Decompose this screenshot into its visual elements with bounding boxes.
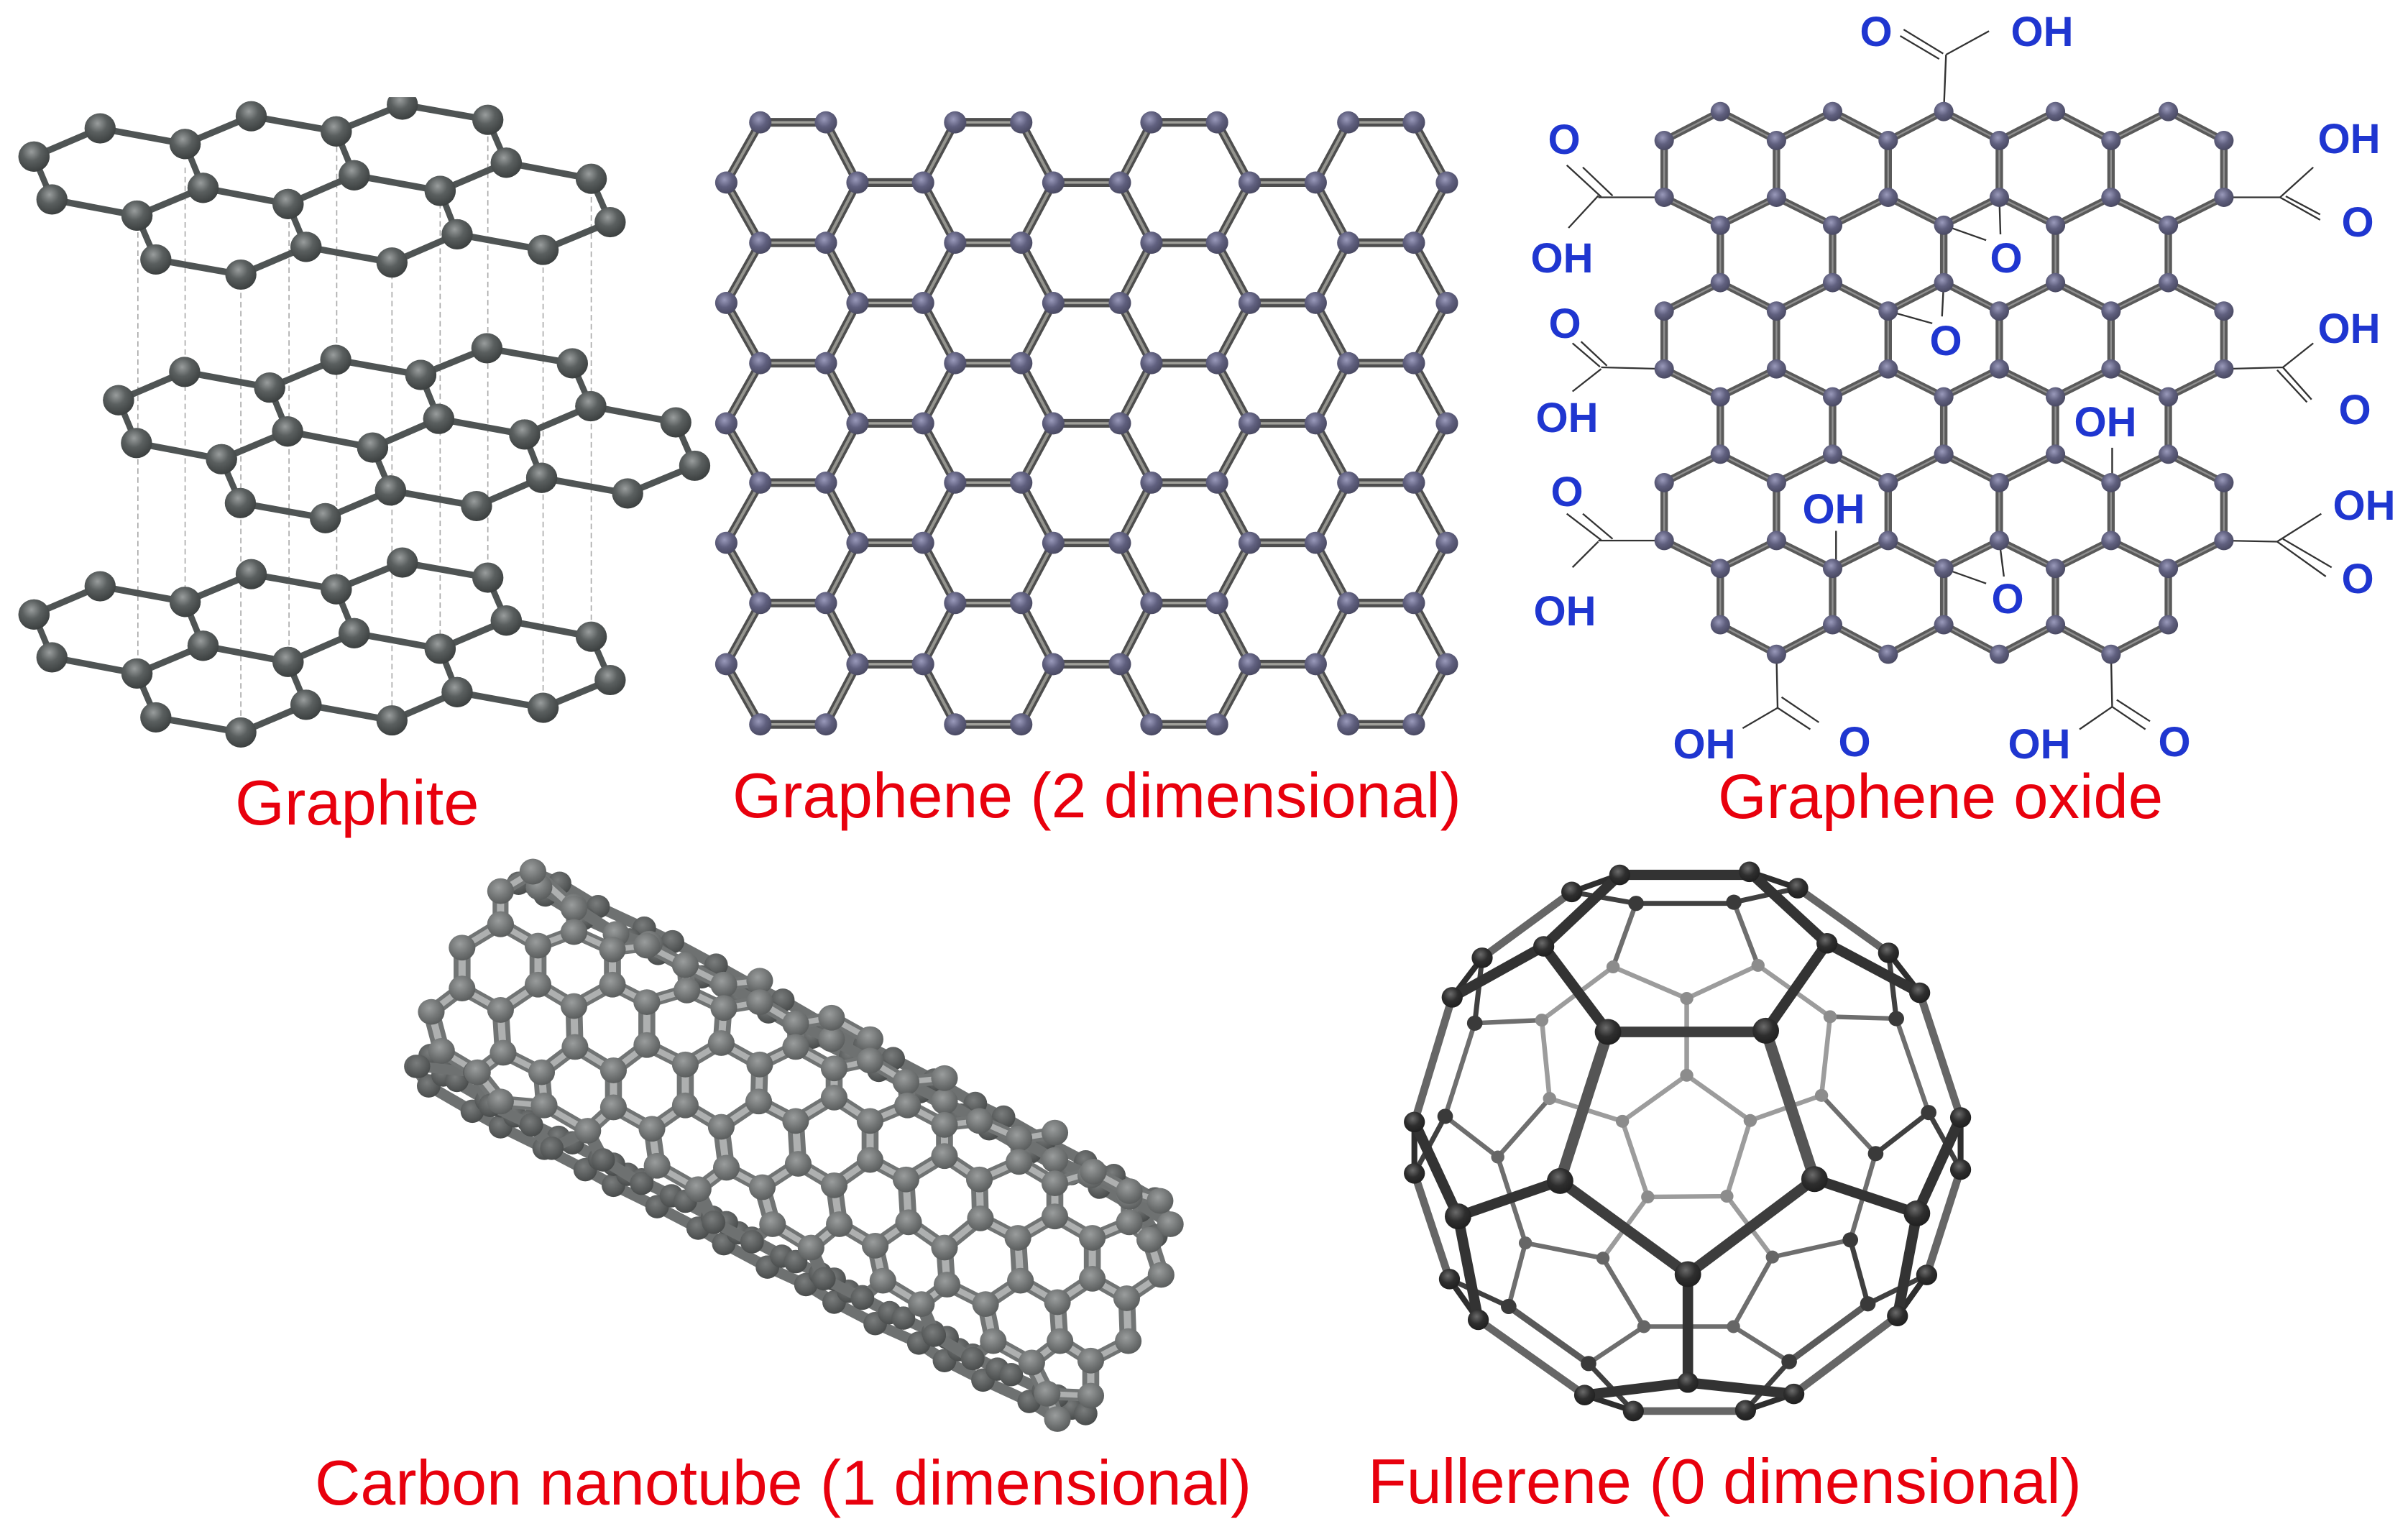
functional group labels: [1531, 9, 2395, 768]
dashed interlayer lines: [138, 127, 592, 733]
label: Graphite: Graphite: [235, 767, 479, 838]
functional group labels: OH: [1535, 395, 1599, 441]
label: Graphene oxide: Graphene oxide: [1718, 762, 2163, 832]
functional group labels: O: [1838, 719, 1871, 766]
carbon lattice: [1664, 111, 2224, 654]
panel: carbon nanotube: [315, 872, 1251, 1518]
functional group labels: O: [2158, 719, 2191, 766]
graphene oxide lattice: [1567, 29, 2332, 730]
label: Graphene (2 dimensional): Graphene (2 dimensional): [732, 761, 1461, 831]
functional group labels: OH: [2074, 399, 2136, 446]
functional group labels: OH: [1531, 235, 1593, 282]
functional group bonds: [1567, 29, 2332, 730]
graphite structure: [34, 72, 694, 733]
functional group labels: OH: [2333, 482, 2395, 529]
panel: graphene: [726, 93, 1479, 831]
top graphene layer: [34, 105, 610, 275]
functional group labels: O: [1548, 116, 1581, 163]
fullerene cage: [1415, 872, 1961, 1411]
rear bonds, light: [1415, 889, 1961, 1411]
panel: graphite: [34, 72, 694, 838]
nanotube structure: [416, 872, 1170, 1419]
rear tube wall edges: [416, 872, 1170, 1419]
front tube wall lattice: [418, 872, 1170, 1419]
functional group labels: O: [2338, 387, 2371, 433]
functional group labels: OH: [1534, 588, 1596, 635]
functional group labels: O: [2341, 556, 2374, 602]
functional group labels: O: [1991, 576, 2024, 623]
functional group labels: O: [1929, 318, 1962, 364]
panel: fullerene: [1368, 872, 2082, 1517]
functional group labels: OH: [2008, 721, 2070, 768]
label: Carbon nanotube (1 dimensional): Carbon nanotube (1 dimensional): [315, 1448, 1251, 1518]
graphene honeycomb lattice: [726, 93, 1479, 768]
bottom graphene layer: [34, 563, 610, 733]
front thick bonds: [1415, 872, 1961, 1395]
panel: graphene oxide: [1531, 9, 2395, 832]
functional group labels: OH: [2317, 116, 2381, 162]
functional group labels: OH: [2317, 306, 2381, 352]
functional group labels: OH: [2011, 9, 2073, 55]
functional group labels: O: [2341, 199, 2374, 246]
functional group labels: O: [1548, 300, 1581, 347]
functional group labels: O: [1860, 9, 1893, 55]
label: Fullerene (0 dimensional): Fullerene (0 dimensional): [1368, 1446, 2082, 1517]
middle graphene layer: [119, 348, 694, 518]
functional group labels: OH: [1673, 721, 1735, 768]
outer ring bonds: [1415, 872, 1961, 1411]
functional group labels: OH: [1803, 486, 1865, 533]
functional group labels: O: [1550, 469, 1584, 515]
functional group labels: O: [1990, 235, 2023, 282]
